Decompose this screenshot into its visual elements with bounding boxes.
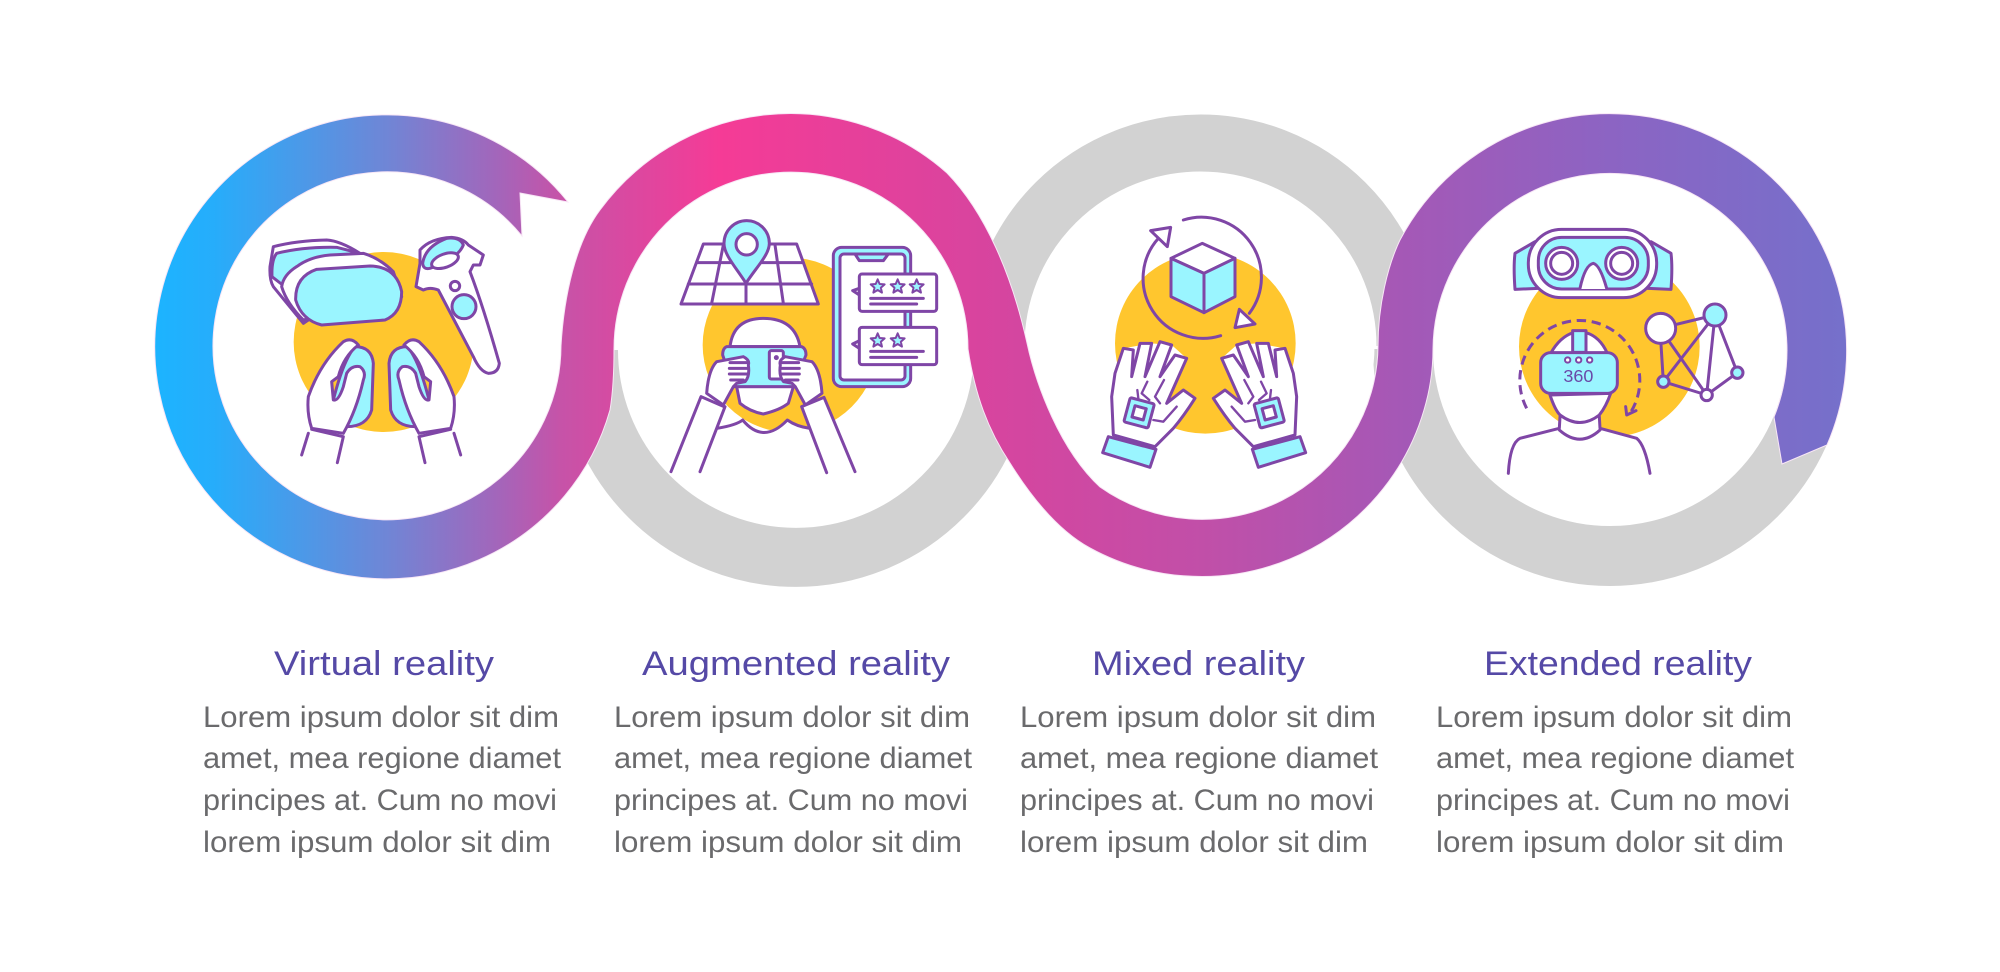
text block: Virtual reality: lorem ipsum dolor sit dim <box>203 826 551 859</box>
text block: Augmented reality: Lorem ipsum dolor sit dim <box>614 701 970 734</box>
gradient ribbon weaving through all four circles <box>155 114 1847 579</box>
text block: Virtual reality: Lorem ipsum dolor sit dim <box>203 701 559 734</box>
text block: Extended reality: principes at. Cum no movi <box>1436 784 1790 817</box>
icon: rotating cube and sensor gloves <box>1103 217 1306 467</box>
label: 360: 360 <box>1563 366 1593 386</box>
text block: Extended reality: amet, mea regione diamet <box>1436 742 1795 775</box>
gray ring: third circle upper half <box>996 143 1405 346</box>
gray ring: second circle lower half <box>588 350 1004 557</box>
icon: VR headset, controller and hands <box>270 237 499 463</box>
text block: Augmented reality: Augmented reality <box>642 645 950 683</box>
text block: Mixed reality: amet, mea regione diamet <box>1020 742 1379 775</box>
text block: Virtual reality: amet, mea regione diamet <box>203 742 562 775</box>
text block: Mixed reality: principes at. Cum no movi <box>1020 784 1374 817</box>
text block: Augmented reality <box>614 645 973 859</box>
icon: goggles, 360 headset wearer and network <box>1508 229 1743 473</box>
text block: Mixed reality: lorem ipsum dolor sit dim <box>1020 826 1368 859</box>
text block: Augmented reality: amet, mea regione diamet <box>614 742 973 775</box>
text block: Virtual reality: principes at. Cum no movi <box>203 784 557 817</box>
text block: Mixed reality: Lorem ipsum dolor sit dim <box>1020 701 1376 734</box>
text block: Mixed reality: Mixed reality <box>1092 645 1305 683</box>
text block: Augmented reality: lorem ipsum dolor sit dim <box>614 826 962 859</box>
white interior: third circle <box>1026 172 1374 520</box>
gray ring: fourth circle lower half <box>1403 349 1817 556</box>
icon: map pin, phone reviews and person with tablet <box>671 221 937 473</box>
text block: Extended reality: Lorem ipsum dolor sit dim <box>1436 701 1792 734</box>
text block: Virtual reality: Virtual reality <box>274 645 494 683</box>
text block: Extended reality: lorem ipsum dolor sit dim <box>1436 826 1784 859</box>
text block: Extended reality <box>1436 645 1795 859</box>
text block: Mixed reality <box>1020 645 1379 859</box>
text block: Augmented reality: principes at. Cum no movi <box>614 784 968 817</box>
text block: Virtual reality <box>203 645 562 859</box>
text block: Extended reality: Extended reality <box>1484 645 1752 683</box>
white interior: first circle <box>213 172 561 520</box>
